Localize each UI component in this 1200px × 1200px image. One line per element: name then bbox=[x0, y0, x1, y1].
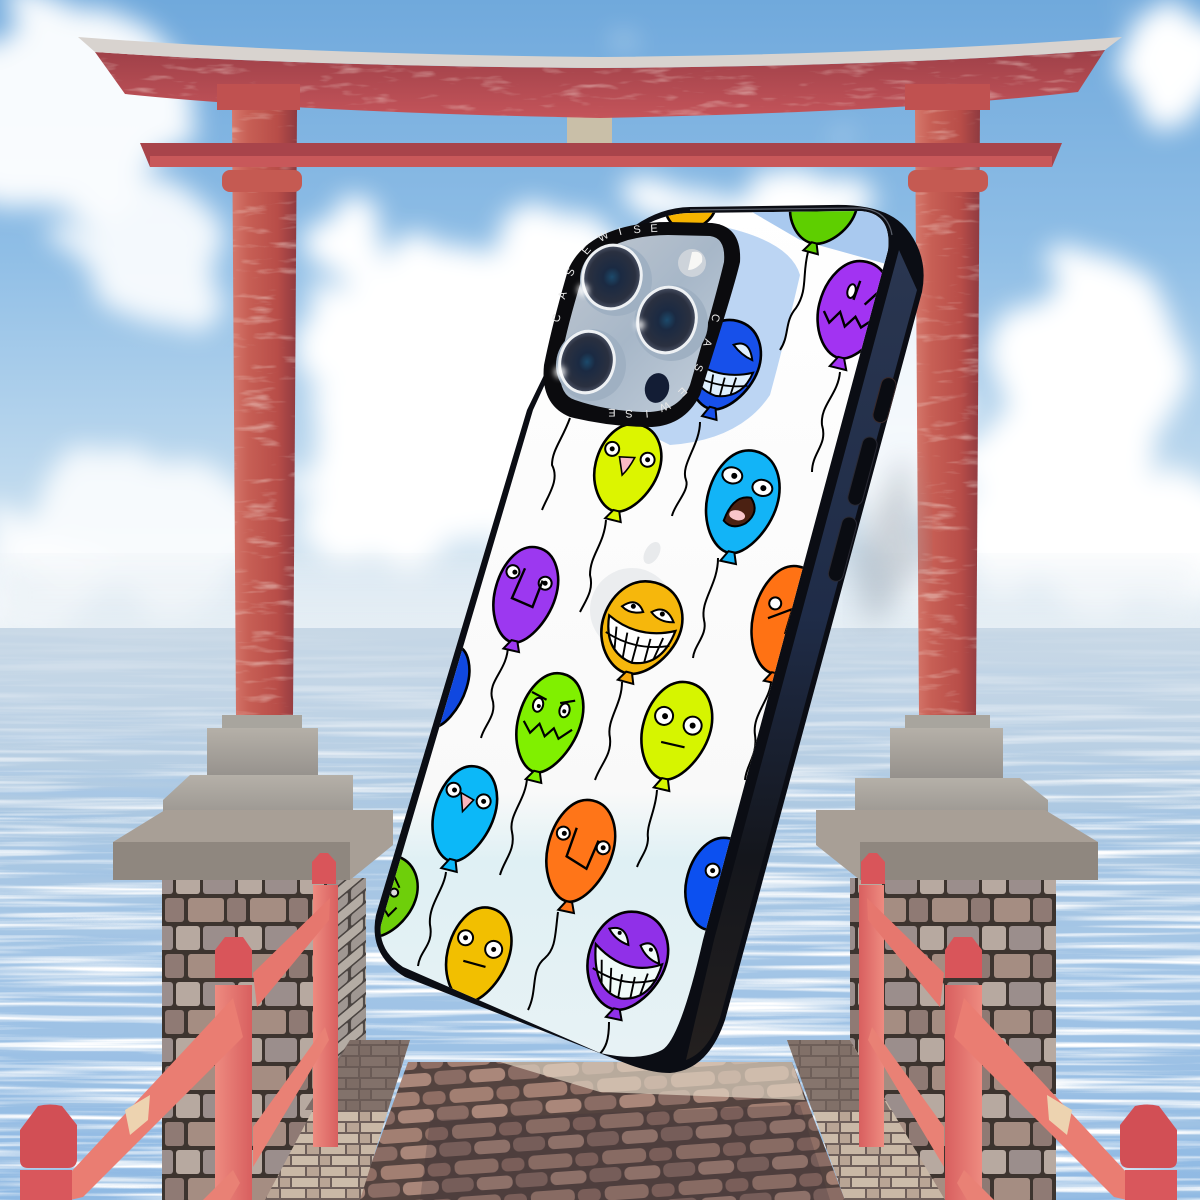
lens lower bbox=[553, 325, 626, 401]
brand text: left edge bbox=[550, 223, 658, 324]
brand text: right edge: S bbox=[625, 407, 633, 419]
brand text: left edge: A bbox=[556, 289, 570, 301]
left curb bbox=[265, 1040, 410, 1200]
brand text: left edge: E bbox=[580, 244, 594, 257]
balloon: sky beak bbox=[418, 759, 505, 966]
side button 1 bbox=[871, 376, 898, 424]
camera glass bbox=[560, 235, 724, 412]
balloon: purple nose bbox=[481, 540, 566, 738]
right curb bbox=[787, 1040, 945, 1200]
side button 2 bbox=[846, 435, 879, 507]
right railing bbox=[859, 853, 1177, 1200]
balloon: yellow grin bbox=[594, 580, 684, 780]
balloon: green top bbox=[779, 211, 858, 350]
lens glare bbox=[554, 284, 645, 378]
balloon: orange nose bbox=[528, 793, 623, 1010]
flash bbox=[678, 249, 706, 277]
balloon: green angry bbox=[500, 666, 592, 875]
camera bezel bbox=[544, 222, 740, 427]
torii gate bbox=[78, 37, 1122, 720]
balloon: blue right lower bbox=[684, 836, 730, 931]
brand text: right edge: E bbox=[608, 406, 616, 418]
brand text: left edge: W bbox=[596, 229, 612, 245]
brand text: right edge: I bbox=[645, 407, 649, 419]
left pillar bbox=[222, 105, 305, 720]
brand text: right edge: A bbox=[700, 337, 714, 349]
stone walkway bbox=[265, 1040, 945, 1200]
brand text: right edge: C bbox=[708, 312, 722, 323]
brand text: right edge: S bbox=[691, 362, 705, 373]
balloon: blue grin bbox=[672, 312, 769, 516]
balloon: purple grin bbox=[577, 904, 676, 1056]
side button 3 bbox=[827, 515, 858, 583]
background: sea bbox=[0, 628, 1200, 1200]
brand text: left edge: S bbox=[633, 224, 642, 236]
phone with balloon case bbox=[341, 164, 924, 1073]
reflection: top band bbox=[752, 211, 888, 264]
reflection: camera plateau bbox=[640, 225, 800, 445]
balloon: blue left edge bbox=[439, 648, 471, 728]
apple logo bbox=[590, 542, 666, 637]
balloon: top orange bbox=[666, 212, 716, 223]
lens top bbox=[576, 239, 652, 316]
left railing bbox=[20, 853, 338, 1200]
phone body bbox=[375, 205, 924, 1073]
balloon: lime plain face bbox=[636, 680, 714, 868]
background: sky bbox=[0, 0, 1200, 630]
brand text: left edge: E bbox=[650, 223, 658, 235]
balloon: lime beak bbox=[542, 417, 669, 612]
brand text: right edge: W bbox=[657, 399, 672, 414]
balloon: orange right bbox=[744, 564, 803, 780]
top beam bbox=[78, 37, 1122, 120]
side band bbox=[686, 250, 917, 1060]
balloon: green left lower bbox=[380, 856, 419, 937]
case screen bbox=[380, 211, 888, 1057]
lower beam bbox=[140, 143, 1062, 167]
balloon: sky shocked bbox=[693, 443, 787, 658]
right stone base bbox=[816, 715, 1098, 1200]
sensor bbox=[642, 370, 672, 406]
case inner highlight on top rim bbox=[690, 208, 892, 235]
brand text: right edge bbox=[608, 312, 722, 419]
balloon: yellow plain bbox=[437, 901, 519, 1009]
lens right bbox=[630, 281, 708, 361]
camera module bbox=[544, 222, 740, 427]
background: clouds bbox=[0, 0, 1200, 625]
right pillar bbox=[908, 105, 990, 720]
centre strut bbox=[567, 106, 612, 143]
phone shadow glow bbox=[850, 450, 925, 630]
balloon: purple angry bbox=[811, 260, 883, 472]
brand text: right edge: E bbox=[675, 384, 689, 398]
brand text: left edge: C bbox=[550, 313, 564, 324]
brand text: left edge: I bbox=[617, 226, 623, 238]
brand text: left edge: S bbox=[564, 267, 578, 278]
left stone base bbox=[113, 715, 393, 1200]
